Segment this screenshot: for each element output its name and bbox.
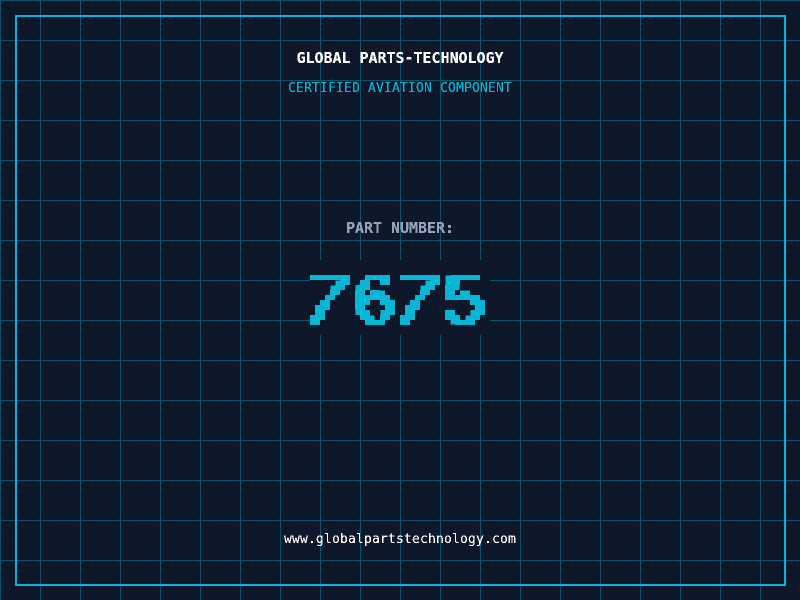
part number value bbox=[310, 264, 487, 335]
website url: www.globalpartstechnology.com bbox=[284, 532, 516, 547]
part number backing panel bbox=[310, 260, 490, 335]
subtitle: CERTIFIED AVIATION COMPONENT bbox=[288, 81, 512, 96]
part number label: PART NUMBER: bbox=[346, 219, 454, 237]
title: GLOBAL PARTS-TECHNOLOGY bbox=[296, 49, 504, 67]
